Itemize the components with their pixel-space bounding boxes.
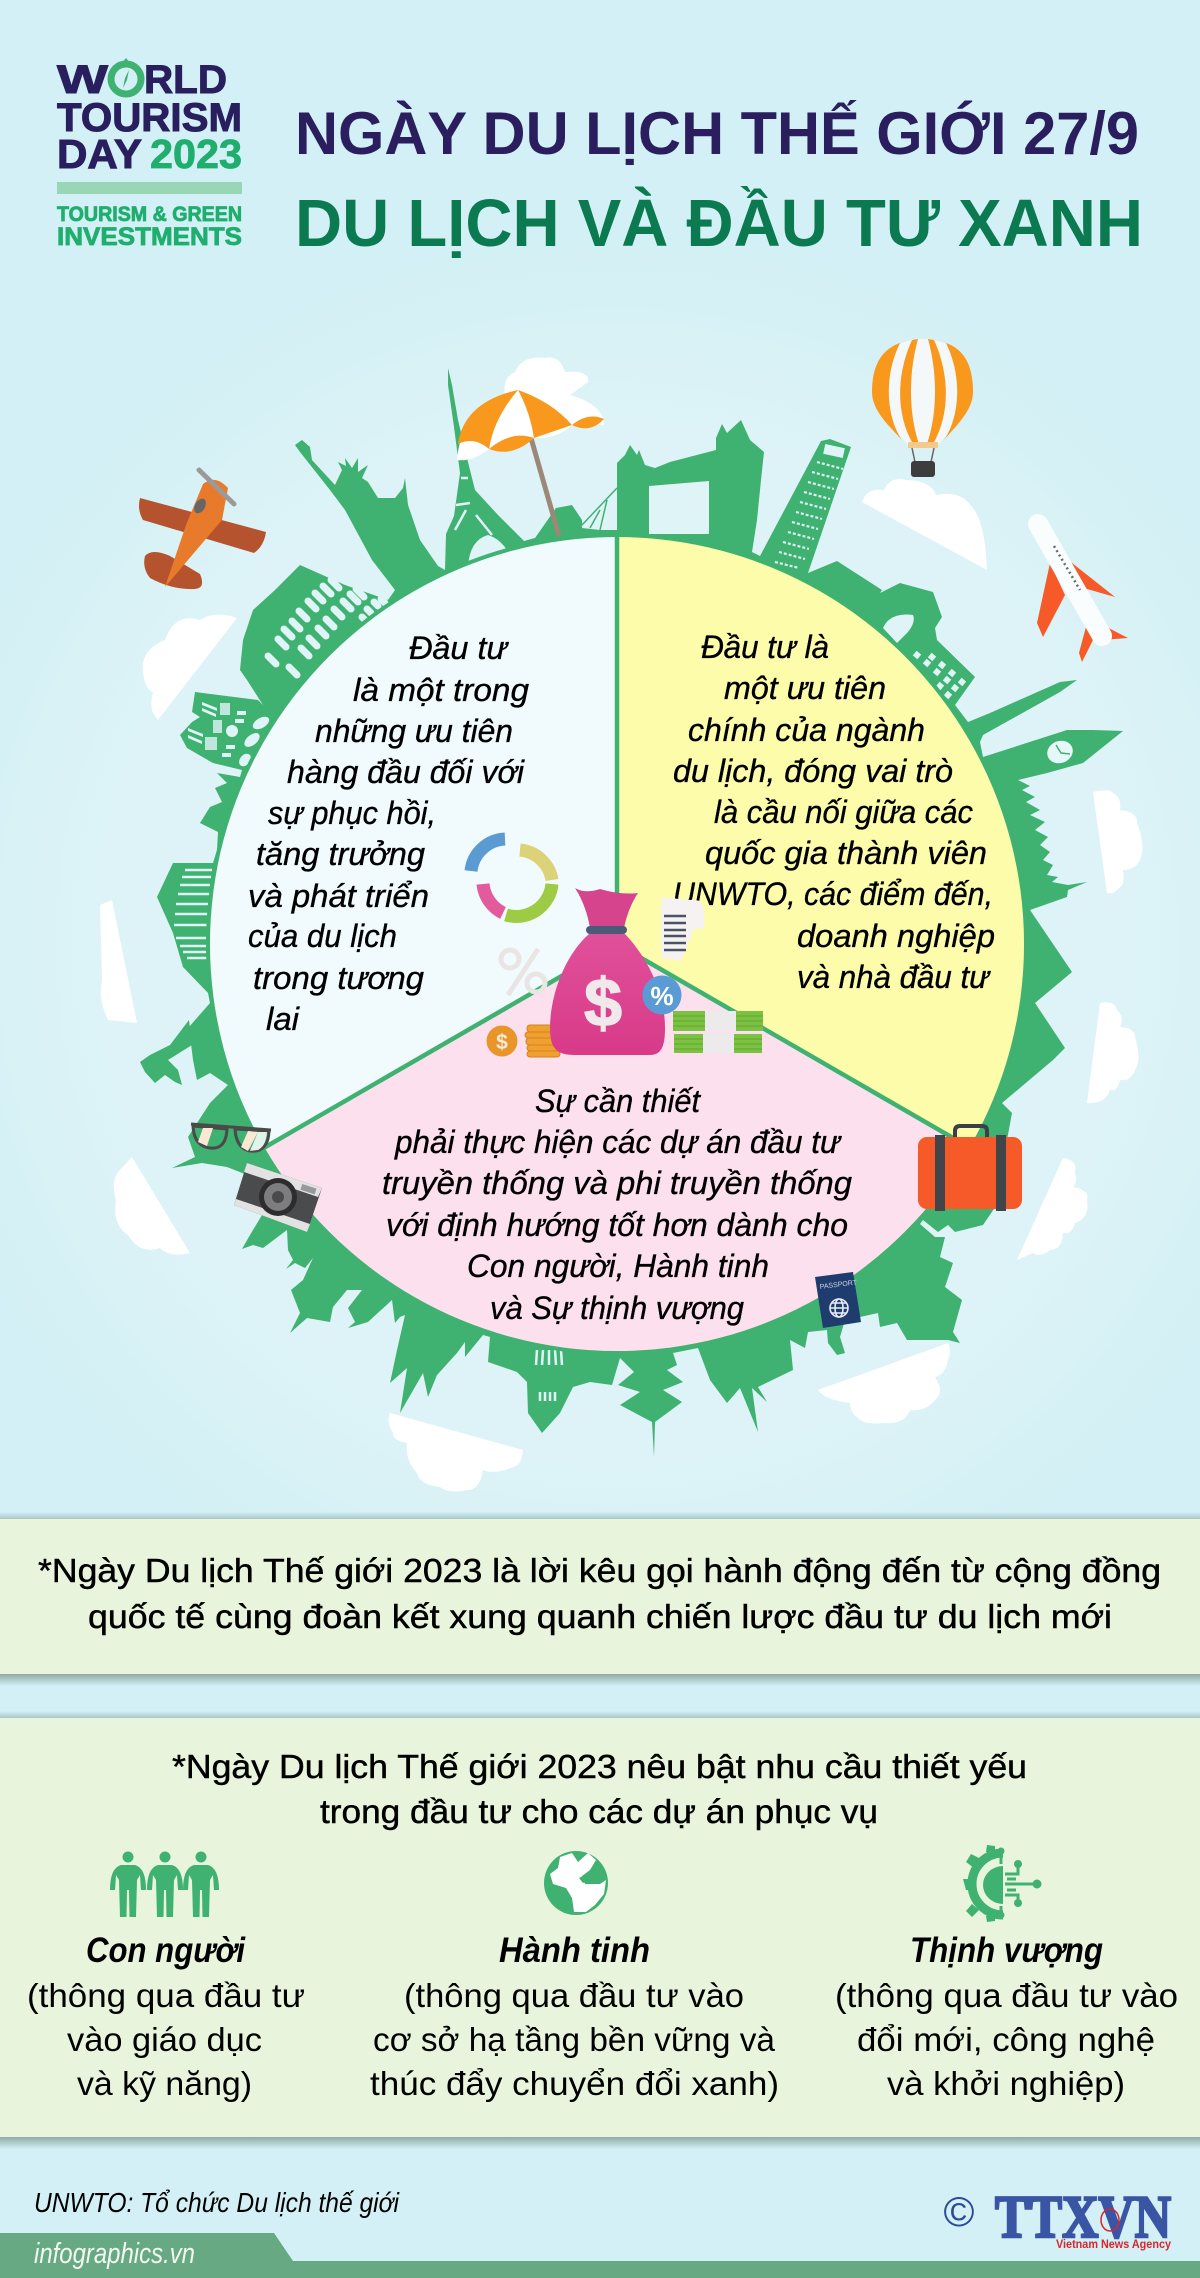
text block: left sector: hàng đầu đối với bbox=[287, 754, 525, 790]
text block: right sector: doanh nghiệp bbox=[797, 918, 995, 954]
logo: World Tourism Day 2023: INVESTMENTS bbox=[57, 223, 242, 251]
column: Thịnh vượng: (thông qua đầu tư vào bbox=[835, 1977, 1178, 2014]
icon: propeller plane bbox=[139, 470, 266, 589]
icon: percent badge: % bbox=[650, 981, 674, 1011]
column: Hành tinh: (thông qua đầu tư vào bbox=[404, 1977, 744, 2014]
text block: left sector: sự phục hồi, bbox=[268, 795, 436, 831]
icon: globe bbox=[544, 1851, 608, 1915]
icon: beach umbrella bbox=[457, 390, 604, 536]
text block: bottom sector: truyền thống và phi truyền thống bbox=[382, 1165, 852, 1201]
Big Ben clock bbox=[1044, 737, 1076, 767]
title: NGÀY DU LỊCH THẾ GIỚI 27/9 bbox=[295, 100, 1139, 167]
building windows bbox=[913, 651, 966, 699]
icon: people bbox=[110, 1852, 219, 1917]
text block: right sector: UNWTO, các điểm đến, bbox=[673, 876, 993, 912]
stripes on tower bbox=[174, 870, 212, 958]
icon: banknotes bbox=[673, 1011, 763, 1053]
panel: call to action: *Ngày Du lịch Thế giới 2023 là lời kêu gọi hành động đến từ cộng đồng bbox=[38, 1552, 1161, 1589]
text block: right sector: du lịch, đóng vai trò bbox=[673, 753, 953, 789]
panel: investment needs: *Ngày Du lịch Thế giới 2023 nêu bật nhu cầu thiết yếu bbox=[172, 1748, 1027, 1785]
text block: left sector: lai bbox=[266, 1001, 300, 1037]
panel: investment needs: trong đầu tư cho các dự án phục vụ bbox=[320, 1793, 878, 1830]
sector: left bbox=[210, 537, 617, 1148]
column: Hành tinh: cơ sở hạ tầng bền vững và bbox=[373, 2021, 776, 2058]
icon: hot air balloon bbox=[872, 339, 973, 477]
sector dividers bbox=[264, 537, 970, 1148]
icon: percent symbol bbox=[501, 949, 545, 995]
icon: airliner bbox=[1037, 524, 1128, 662]
column: Con người: Con người bbox=[86, 1931, 246, 1970]
Notre-Dame windows bbox=[188, 702, 271, 769]
logo: World Tourism Day 2023: DAY bbox=[57, 131, 142, 177]
text block: left sector: những ưu tiên bbox=[315, 713, 513, 749]
icon: coin stack bbox=[525, 1025, 560, 1057]
logo: World Tourism Day 2023 bbox=[57, 58, 242, 251]
title: DU LỊCH VÀ ĐẦU TƯ XANH bbox=[295, 186, 1143, 261]
text block: left sector: trong tương bbox=[253, 960, 424, 996]
sector: bottom bbox=[264, 944, 970, 1351]
icon: percent badge bbox=[642, 976, 682, 1014]
source note: UNWTO: Tổ chức Du lịch thế giới bbox=[34, 2187, 400, 2218]
icon: donut chart bbox=[471, 839, 552, 916]
column: Con người: vào giáo dục bbox=[67, 2021, 262, 2058]
icon: coin: $ bbox=[496, 1031, 508, 1054]
panel: investment needs bbox=[0, 1711, 1200, 2149]
icon: sunglasses bbox=[191, 1124, 271, 1151]
icon: gear and circuit bbox=[963, 1845, 1042, 1922]
sector: right bbox=[617, 537, 1024, 1148]
column: Thịnh vượng: Thịnh vượng bbox=[910, 1931, 1103, 1970]
column: Con người bbox=[27, 1931, 305, 2102]
logo: World Tourism Day 2023: W bbox=[57, 58, 108, 102]
text block: left sector: của du lịch bbox=[248, 918, 397, 954]
column: Con người: và kỹ năng) bbox=[77, 2065, 252, 2102]
text block: left sector: là một trong bbox=[353, 672, 529, 708]
text block: right sector: một ưu tiên bbox=[724, 670, 886, 706]
icon: camera bbox=[234, 1163, 322, 1232]
Eiffel lattice bbox=[455, 478, 492, 535]
footer site name: infographics.vn bbox=[34, 2238, 195, 2270]
panel: call to action bbox=[0, 1512, 1200, 1686]
text block: left sector: và phát triển bbox=[248, 878, 429, 914]
logo: TTXVN bbox=[944, 2184, 1171, 2251]
icon: coin bbox=[486, 1026, 518, 1056]
text block: left sector: Đầu tư bbox=[409, 630, 510, 666]
logo: World Tourism Day 2023: RLD bbox=[144, 58, 227, 102]
text block: right sector: quốc gia thành viên bbox=[705, 835, 987, 871]
Eiffel arch bbox=[468, 535, 512, 566]
icon: passport bbox=[815, 1272, 861, 1328]
icon: suitcase bbox=[918, 1126, 1022, 1211]
text block: bottom sector: phải thực hiện các dự án đầu tư bbox=[394, 1124, 843, 1160]
pie circle bbox=[206, 533, 1028, 1355]
bottom building windows bbox=[536, 1350, 562, 1401]
logo: TTXVN: Vietnam News Agency bbox=[1056, 2237, 1171, 2251]
title bbox=[295, 100, 1143, 261]
text block: right sector: Đầu tư là bbox=[701, 629, 829, 665]
icon: money bag: $ bbox=[584, 965, 622, 1041]
clouds bbox=[100, 358, 1142, 1491]
globe skyline silhouette bbox=[140, 368, 1123, 1457]
logo: TTXVN: © bbox=[944, 2188, 975, 2235]
icon: receipt bbox=[659, 897, 705, 962]
column: Hành tinh: Hành tinh bbox=[499, 1931, 650, 1970]
Tower Bridge opening bbox=[649, 481, 709, 534]
text block: right sector bbox=[673, 629, 995, 995]
Colosseum windows bbox=[268, 580, 385, 675]
logo: World Tourism Day 2023: 2023 bbox=[150, 131, 242, 177]
icon: money bag bbox=[550, 888, 665, 1055]
icon: compass ring bbox=[111, 58, 141, 94]
column: Thịnh vượng: đổi mới, công nghệ bbox=[857, 2021, 1155, 2058]
text block: bottom sector bbox=[382, 1083, 852, 1326]
text block: bottom sector: và Sự thịnh vượng bbox=[490, 1290, 744, 1326]
text block: bottom sector: Sự cần thiết bbox=[535, 1083, 701, 1119]
Pisa tower details bbox=[775, 462, 843, 568]
logo: World Tourism Day 2023: TOURISM & GREEN bbox=[57, 203, 242, 226]
arch window bbox=[883, 615, 914, 643]
text block: bottom sector: Con người, Hành tinh bbox=[467, 1248, 769, 1284]
icon: passport: PASSPORT bbox=[819, 1279, 858, 1291]
logo: TTXVN: TTXVN bbox=[995, 2184, 1171, 2250]
column: Hành tinh bbox=[370, 1931, 779, 2102]
column: Thịnh vượng bbox=[835, 1931, 1178, 2102]
footer bar bbox=[0, 2233, 1200, 2278]
column: Con người: (thông qua đầu tư bbox=[27, 1977, 305, 2014]
text block: right sector: chính của ngành bbox=[688, 712, 925, 748]
column: Hành tinh: thúc đẩy chuyển đổi xanh) bbox=[370, 2065, 779, 2102]
column: Thịnh vượng: và khởi nghiệp) bbox=[887, 2065, 1125, 2102]
text block: right sector: và nhà đầu tư bbox=[797, 959, 992, 995]
text block: right sector: là cầu nối giữa các bbox=[714, 794, 973, 830]
text block: left sector: tăng trưởng bbox=[256, 836, 425, 872]
background glow around globe bbox=[0, 224, 1200, 1664]
panel: call to action: quốc tế cùng đoàn kết xung quanh chiến lược đầu tư du lịch mới bbox=[88, 1598, 1112, 1635]
text block: bottom sector: với định hướng tốt hơn dành cho bbox=[386, 1207, 848, 1243]
logo: World Tourism Day 2023: TOURISM bbox=[57, 96, 242, 140]
text block: left sector bbox=[248, 630, 529, 1037]
